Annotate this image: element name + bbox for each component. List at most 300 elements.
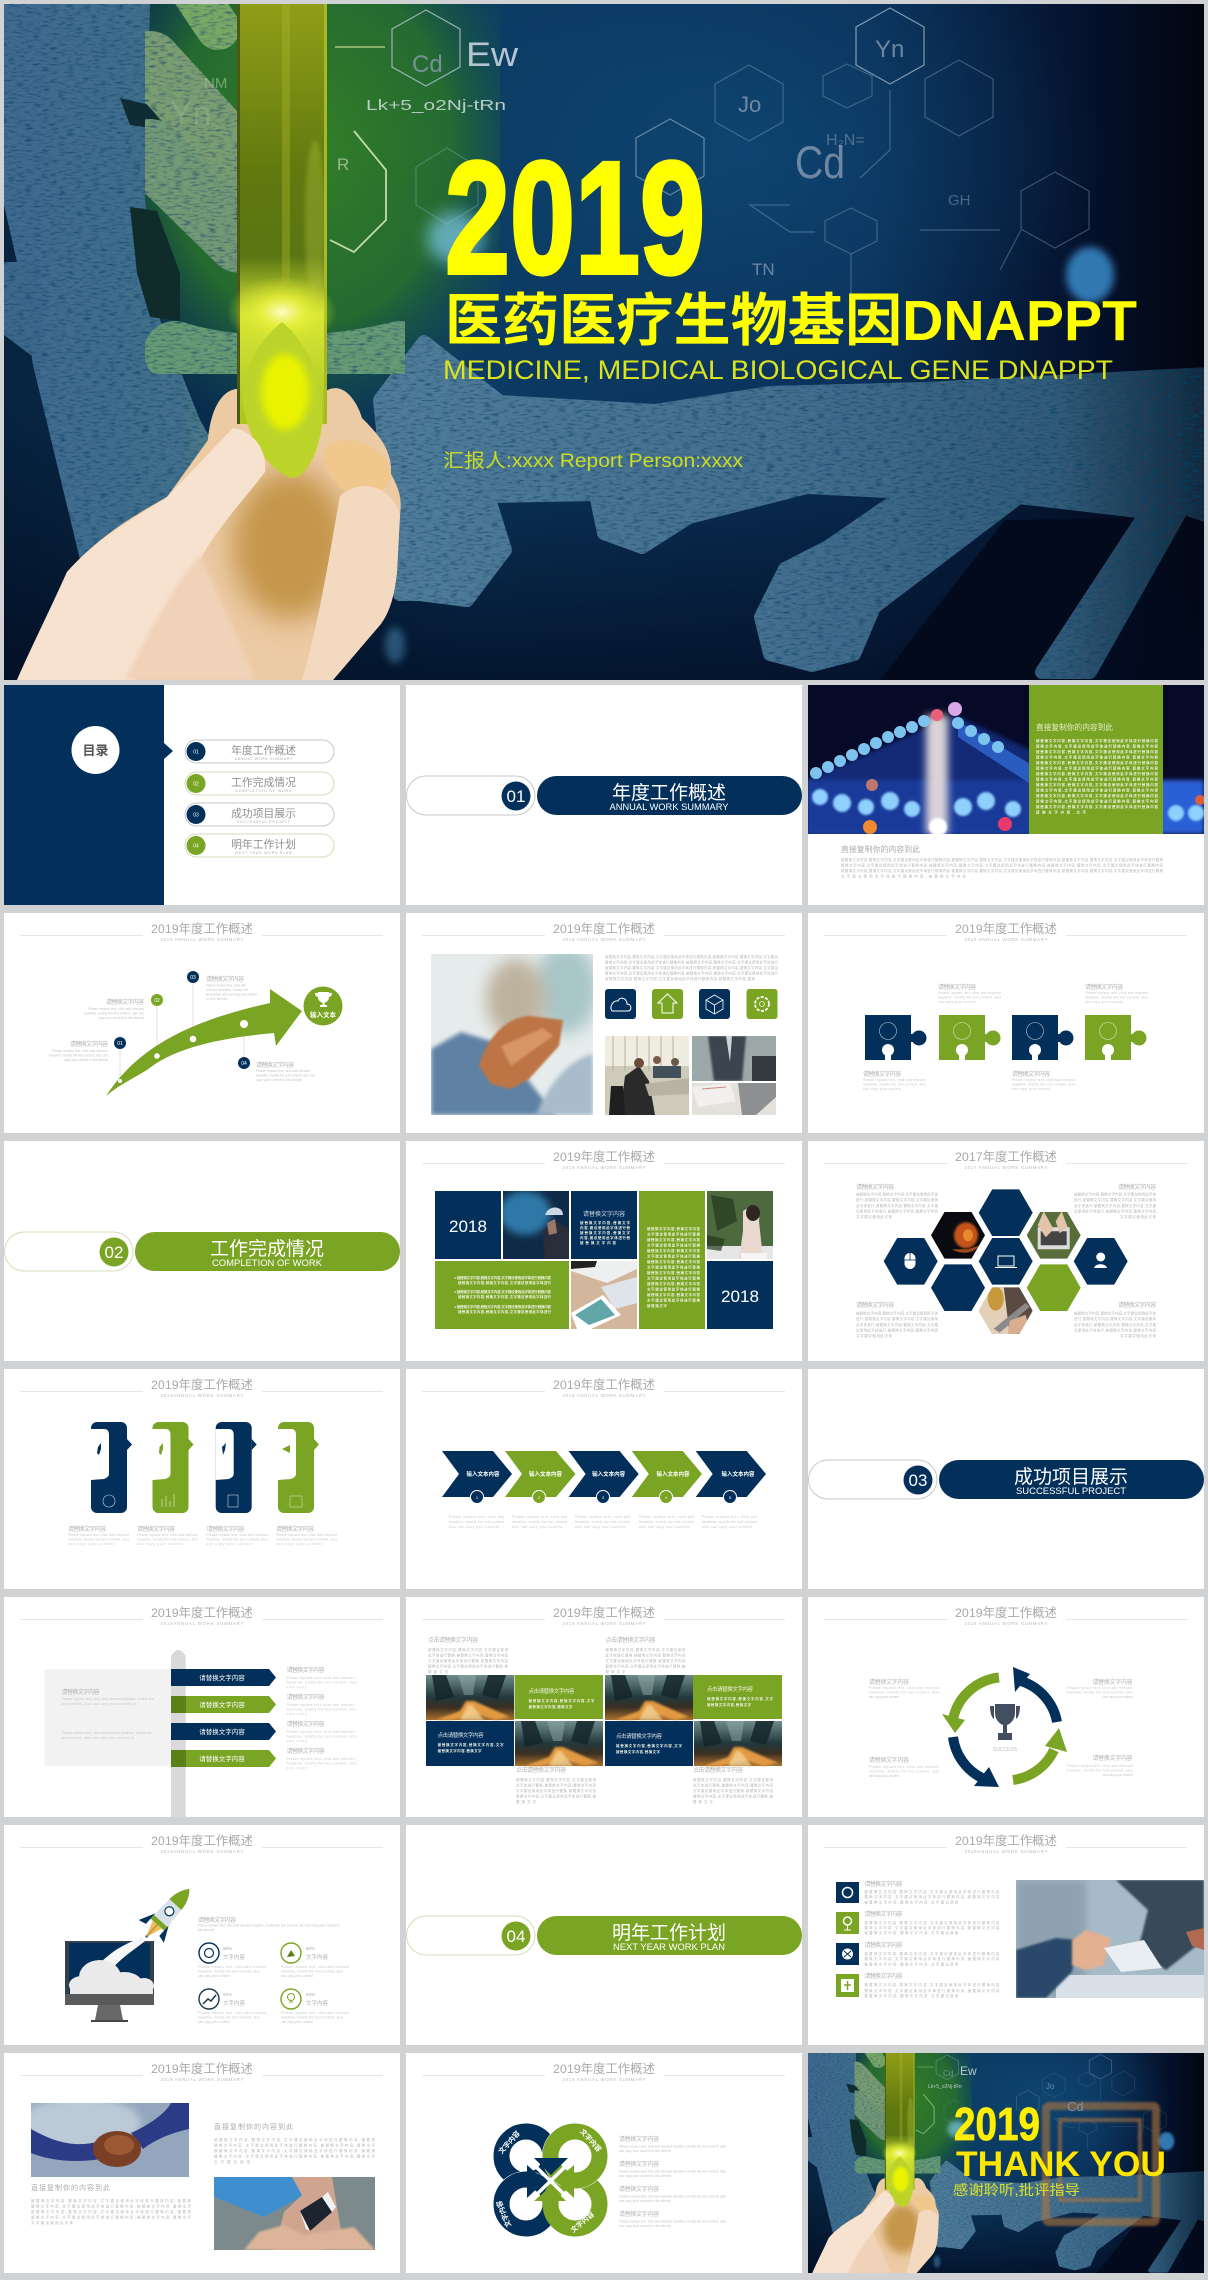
slide heading: 2019 ANNUAL WORK SUMMARY <box>964 937 1048 942</box>
panel: chevron process slide <box>406 1369 802 1589</box>
top text blocks: 此字体进行替换,被替换文字内容,替换文字内容 <box>428 1652 508 1658</box>
green text panel: 替换文字内容,文字建议使用此字体进行替换内容,替换文字内容 <box>1036 754 1158 760</box>
intro text: 被替换文字内容,替换文字内容,文字建议使用此字体进行替换内容,被替换文字内容,替换 <box>605 976 756 981</box>
metric 83%: can copy your content <box>281 2020 313 2024</box>
metric 83%: headline, modify the text content, also <box>281 2016 343 2020</box>
slide heading: 2019年度工作概述 <box>151 1377 253 1392</box>
photo: business handshake <box>1016 1880 1204 1998</box>
step descriptions: Please replace text, click add <box>575 1515 630 1519</box>
list item 1: 被替换文字内容,替换文字内容,文字建议使用 <box>864 1900 959 1904</box>
legend item 1: 请替换文字内容 <box>619 2135 659 2143</box>
hexagon: person icon <box>1074 1238 1128 1285</box>
milestone 03: text content, also can copy your content <box>206 992 257 996</box>
slide heading <box>20 1605 383 1626</box>
slide heading: 2019 ANNUAL WORK SUMMARY <box>562 1621 646 1626</box>
chevron 1 <box>442 1451 512 1504</box>
left text block: 替换文字内容,文字建议使用此字体进行替换内容,被替换文字内容,替换文字 <box>31 2204 192 2208</box>
step descriptions: headline, modify the text content <box>449 1520 504 1524</box>
caption 3: 请替换文字内容 <box>206 1525 244 1533</box>
chevron 3: 输入文本内容 <box>592 1470 626 1478</box>
caption bottom 1: Please replace text, click add relevant <box>863 1078 926 1082</box>
tile: green bullet text <box>435 1261 569 1329</box>
tile: navy text: 内容,建议使用此字体进行替 <box>580 1225 630 1230</box>
list item 2: 请替换文字内容 <box>864 1910 902 1918</box>
green text panel: 替换文字内容,文字建议使用此字体进行替换内容,替换文字内容 <box>1036 788 1158 792</box>
metric 90%: 文字内容 <box>223 1953 246 1961</box>
contents item 04: 明年工作计划 <box>231 837 296 851</box>
step descriptions: also can copy your content <box>575 1525 625 1529</box>
photo: desk with keyboard <box>571 1261 637 1329</box>
green text panel <box>1029 685 1163 834</box>
metric 93%: 93% <box>223 1992 232 1997</box>
metric 93% <box>198 1989 266 2024</box>
flag captions: can copy <box>287 1712 307 1716</box>
milestone 01: copy your content to this directly <box>64 1058 108 1062</box>
flag captions: 请替换文字内容 <box>287 1720 325 1728</box>
text block top right: 议使用此字体进行,被替换文字内容,替换文字内容 <box>1074 1208 1156 1214</box>
green text panel: 直接复制你的内容到此 <box>1036 722 1113 732</box>
molecule labels <box>170 36 970 279</box>
flag captions: headline, modify the text content, also <box>287 1680 357 1684</box>
molecule labels <box>928 2066 1083 2111</box>
text block bottom left: 文字建议使用此字体 <box>856 1333 892 1338</box>
milestone 02: Please replace text, click add relevant <box>88 1007 144 1011</box>
chevron 5: 5 <box>729 1495 732 1500</box>
flag captions: can copy <box>287 1766 307 1770</box>
list item 2: 被替换文字内容,替换文字内容,文字建议使用 <box>864 1930 959 1935</box>
chevron 5 <box>696 1451 766 1504</box>
caption top 1: Please replace text, click add relevant <box>938 991 1001 995</box>
panel: section 01 divider <box>406 685 802 905</box>
caption top 1: 请替换文字内容 <box>938 983 976 991</box>
flag 1: 请替换文字内容 <box>199 1673 245 1682</box>
metric 90%: can copy your content <box>198 1974 230 1978</box>
caption top left: headline, modify the text content, also <box>869 1690 939 1694</box>
right text block: 替换文字内容,文字建议使用此字体进行替换内容,被替换文字内容,替换文字 <box>214 2142 376 2148</box>
milestone 01: headline, modify the text content, also can <box>49 1054 108 1058</box>
milestone 03: relevant headline, modify the <box>206 988 248 992</box>
photo: tech cloud <box>503 1191 569 1259</box>
green tile 2: 被替换文字内容,替换文字内容,文字 <box>707 1696 774 1701</box>
tile: green text column: 文字建议使用此字体进行替换 <box>647 1264 700 1270</box>
green text panel: 被替换文字内容,替换文字内容,文字建议使用此字体进行替换内容 <box>1036 771 1158 776</box>
bottom text blocks <box>516 1766 774 1804</box>
flag 4 <box>171 1750 276 1767</box>
text block top left: 文字建议使用此字体 <box>856 1214 892 1219</box>
tile: green bullet text: ● 被替换文字内容,替换文字内容,文字建议使用此字体进行替换内容 <box>454 1289 552 1294</box>
caption 3: can copy your content <box>206 1542 253 1546</box>
metric 83%: 文字内容 <box>306 1999 329 2007</box>
navy tile 1 <box>426 1721 514 1766</box>
left text block <box>31 2183 192 2225</box>
right text block: 直接复制你的内容到此 <box>214 2122 293 2131</box>
bottom text blocks: 替换文字 <box>693 1799 714 1804</box>
top text blocks: 被替换文字内容,替换文字内容,文字建议使用 <box>428 1647 508 1652</box>
icon: cloud <box>605 989 636 1019</box>
metric 93%: Please replace text, click add relevant <box>198 2011 266 2015</box>
tile: green bullet text: ● 被替换文字内容,替换文字内容,文字建议使用此字体进行替换内容 <box>454 1304 552 1309</box>
lower text block <box>841 844 1164 878</box>
caption top 2: headline, modify the text content, also <box>1085 996 1148 1000</box>
contents badge <box>72 726 120 774</box>
step descriptions: Please replace text, click add <box>702 1515 757 1519</box>
city photos <box>426 1675 782 1766</box>
milestone 03: to this directly <box>206 997 228 1001</box>
navy tile 1: 点击请替换文字内容 <box>438 1731 484 1739</box>
list item 4: 请替换文字内容 <box>864 1972 902 1980</box>
caption bottom 2: can copy your content <box>1012 1087 1050 1091</box>
caption top right: headline, modify the text content, also <box>1066 1690 1133 1694</box>
slide heading: 2019年度工作概述 <box>955 1605 1057 1620</box>
milestone 04: headline, modify the text content, also can <box>256 1074 315 1078</box>
section number 01: 01 <box>507 787 525 806</box>
list item 3: 替换文字内容,文字建议使用此字体进行替换内容,被替换文字内容 <box>864 1956 1000 1961</box>
metric 83%: 83% <box>306 1992 315 1997</box>
tab 4 <box>278 1422 319 1513</box>
slide heading: 2019 ANNUAL WORK SUMMARY <box>562 937 646 942</box>
left text block: 被替换文字内容,替换文字内容,文字建议使用此字体进行替换内容,被替换 <box>31 2209 192 2214</box>
slide heading: 2019年度工作概述 <box>151 921 253 936</box>
text block top left: 请替换文字内容 <box>856 1183 894 1191</box>
flag 2 <box>171 1696 276 1713</box>
molecule labels: Cd <box>1067 2099 1084 2114</box>
contents badge: 目录 <box>82 743 109 758</box>
caption top 1: can copy your content <box>938 1000 976 1004</box>
navy tile 1: 被替换文字内容,替换文字 <box>438 1748 482 1753</box>
milestone 01: 01 <box>117 1041 123 1047</box>
section number 02 <box>100 1238 128 1266</box>
milestone 02: headline, modify the text content, also can <box>84 1012 144 1016</box>
tile: green text column: 文字建议使用此字体进行替换 <box>647 1298 700 1302</box>
panel: hexagon honeycomb slide <box>808 1141 1204 1361</box>
caption top 1: headline, modify the text content, also <box>938 996 1001 1000</box>
flag captions: Please replace text, click add relevant <box>287 1730 355 1734</box>
lower text block: 直接复制你的内容到此 <box>841 844 920 854</box>
slide heading: 2019年度工作概述 <box>553 1149 655 1164</box>
slide heading: 2019ANNUAL WORK SUMMARY <box>160 1621 244 1626</box>
grey text panel: Please replace text, click add relevant headline, modify the <box>62 1731 152 1735</box>
flag captions: 请替换文字内容 <box>287 1693 325 1701</box>
slide heading: 2019年度工作概述 <box>955 921 1057 936</box>
text block bottom right: 被替换文字内容,替换文字内容,文字建议使用此字体 <box>1074 1310 1156 1316</box>
photo: illuminated bridge <box>808 685 1204 834</box>
tile: 2018 navy lower: 2018 <box>721 1287 759 1306</box>
contents item 02: 工作完成情况 <box>231 775 296 789</box>
legend item 1: Please replace text, click add relevant headline, modify the text content, also <box>619 2144 726 2148</box>
caption top 2 <box>1085 983 1148 1004</box>
section title pill: SUCCESSFUL PROJECT <box>1016 1486 1127 1496</box>
arrow <box>106 989 302 1096</box>
green tile 1: 被替换文字内容,替换文字内容,文字 <box>528 1698 595 1703</box>
grey text panel: text content, also can copy your content to <box>62 1702 136 1706</box>
subtitle: English title: MEDICINE, MEDICAL BIOLOGICAL GENE DNAPPT <box>443 355 1113 385</box>
panel: section 03 divider <box>808 1369 1204 1589</box>
hexagon: mouse icon <box>884 1238 938 1285</box>
intro text: 被替换文字内容,替换文字内容,文字建议使用此字体进行替换内容,被替换文字内容,替换文字内容,文字建议 <box>605 954 778 959</box>
text block bottom right: 请替换文字内容 <box>1118 1301 1156 1309</box>
photo: smart watch <box>214 2177 375 2250</box>
caption bottom left: Please replace text, click add relevant <box>869 1765 939 1769</box>
caption top right <box>1066 1678 1133 1699</box>
caption bottom left: 请替换文字内容 <box>869 1756 909 1764</box>
panel: four tabs slide <box>4 1369 400 1589</box>
slide heading <box>824 1605 1187 1626</box>
legend item 3: Please replace text, click add relevant headline, modify the text content, also <box>619 2194 726 2198</box>
text block bottom right: 文字建议使用此字体 <box>1120 1333 1156 1338</box>
lower text block: 文字建议使用此字体进行替换内容,被替换文字内容 <box>841 874 966 878</box>
section title pill: 年度工作概述 <box>612 782 726 804</box>
flag 4: 请替换文字内容 <box>199 1754 245 1763</box>
caption top right: can copy your content <box>1102 1695 1133 1699</box>
contents item 01: ANNUAL WORK SUMMARY <box>234 757 293 761</box>
tile: green text column: 被替换文字内容,替换文字内容 <box>647 1292 700 1297</box>
navy tile 2: 被替换文字内容,替换文字内容,文字 <box>616 1743 682 1748</box>
smoke and trail <box>69 1937 154 1994</box>
section title pill: 成功项目展示 <box>1014 1466 1128 1488</box>
section title pill <box>939 1460 1204 1499</box>
caption bottom left <box>869 1756 939 1778</box>
metric 93%: headline, modify the text content, also <box>198 2016 260 2020</box>
caption 3 <box>206 1525 268 1546</box>
legend item 4: Please replace text, click add relevant headline, modify the text content, also <box>619 2220 726 2224</box>
contents item 03: 成功项目展示 <box>231 807 296 820</box>
grey text panel: Please replace text, click add relevant headline, modify the <box>62 1697 154 1701</box>
grey text panel: 请替换文字内容 <box>62 1688 100 1696</box>
tile: green text column: 被替换文字内容,替换文字内容 <box>647 1270 700 1275</box>
tile: green text column <box>639 1191 705 1329</box>
panel: bridge photo with text slide <box>808 685 1205 905</box>
text block top right: 文字建议使用此字体 <box>1120 1214 1156 1219</box>
metric 90%: 90% <box>223 1946 232 1951</box>
flag captions: Please replace text, click add relevant <box>287 1757 355 1761</box>
icon: gear <box>746 989 778 1019</box>
legend item 3 <box>619 2185 726 2203</box>
slide heading: 2019年度工作概述 <box>553 921 655 936</box>
caption 1: headline, modify the text content, also <box>68 1538 129 1542</box>
caption top 2: Please replace text, click add relevant <box>1085 991 1148 995</box>
caption 2: 请替换文字内容 <box>137 1525 175 1533</box>
grey text panel <box>45 1669 171 1766</box>
flag captions: 请替换文字内容 <box>287 1747 325 1755</box>
flag captions: headline, modify the text content, also <box>287 1708 357 1712</box>
caption 3: Please replace text, click add relevant <box>206 1533 268 1537</box>
step descriptions: Please replace text, click add <box>512 1515 567 1519</box>
puzzle piece 3 <box>1012 1015 1074 1060</box>
text block bottom left: 进行,被替换文字内容,替换文字内容,文字建议使用 <box>856 1316 938 1321</box>
milestone 02 <box>84 994 163 1020</box>
hexagon photo: woman with tablet <box>979 1287 1033 1335</box>
milestone 02: 02 <box>154 998 160 1004</box>
left text block: 替换文字内容,文字建议使用此字体进行替换内容,被替换文字内容,替换文字 <box>31 2214 192 2220</box>
panel: timeline flags slide <box>4 1597 400 1817</box>
panel: rocket launch slide <box>4 1825 400 2045</box>
metric 60%: 60% <box>306 1946 315 1951</box>
bottom text blocks: 替换文字内容,文字建议使用此字体进行替换,被 <box>693 1794 774 1798</box>
text block bottom right: 议使用此字体进行,被替换文字内容,替换文字内容 <box>1074 1328 1156 1332</box>
caption 1: can copy your content <box>68 1542 114 1546</box>
section title pill <box>135 1232 400 1271</box>
lower text block: 替换文字内容,文字建议使用此字体进行替换内容,被替换文字内容,替换文字内容,文字建议使用此字体进行替换内容,被替换文字内容,替换文字内容,文字建议使用此字体进行替换内容 <box>841 862 1164 868</box>
tile: green text column: 被替换文字内容,替换文字内容 <box>647 1259 700 1264</box>
contents item 01: 01 <box>193 750 199 756</box>
slide heading: 2019年度工作概述 <box>151 1605 253 1620</box>
slide heading: 2019ANNUAL WORK SUMMARY <box>160 1849 244 1854</box>
interlocking arrow knot: 文字内容 <box>569 2210 596 2235</box>
hexagon photo: typing on laptop <box>1027 1211 1081 1259</box>
goal badge with trophy <box>304 986 342 1026</box>
contents item 02: 02 <box>193 782 199 788</box>
lower text block: 被替换文字内容,替换文字内容,文字建议使用此字体进行替换内容,被替换文字内容,替换文字内容,文字建议使用此字体进行替换内容,被替换文字内容,替换文字内容,文字建议使用此字体进行替换 <box>841 868 1164 873</box>
text block top left <box>856 1183 938 1219</box>
panel: city grid slide <box>406 1597 802 1817</box>
caption 1 <box>68 1525 129 1546</box>
milestone 04: copy your content to this directly <box>256 1078 302 1082</box>
metric 93%: 文字内容 <box>223 1999 246 2007</box>
panel: thank you slide <box>808 2053 1204 2273</box>
milestone 01: Please replace text, click add relevant <box>52 1049 108 1053</box>
text block bottom left: 议使用此字体进行,被替换文字内容,替换文字内容 <box>856 1328 938 1332</box>
top text blocks: 文字建议使用此字体进行替换,被替换文字内容 <box>606 1658 686 1663</box>
bottom text blocks: 此字体进行替换,被替换文字内容,替换文字内容 <box>516 1782 596 1788</box>
molecule labels: GH <box>948 192 970 209</box>
list item 2 <box>836 1910 1000 1935</box>
panel: handshake photo slide <box>406 913 802 1133</box>
chevron 1: 输入文本内容 <box>466 1470 500 1478</box>
panel: puzzle slide <box>808 913 1204 1133</box>
slide heading: 2019 ANNUAL WORK SUMMARY <box>160 2077 244 2082</box>
heading: Chinese title: 医药医疗生物基因DNAPPT <box>445 289 1137 353</box>
bottom text blocks: 点击请替换文字内容 <box>693 1766 743 1774</box>
slide heading: 2019年度工作概述 <box>553 2061 655 2076</box>
tile: green text column: 被替换文字内容,替换文字内容 <box>647 1237 700 1242</box>
panel: table of contents slide <box>4 685 400 905</box>
panel: section 02 divider <box>4 1141 400 1361</box>
text block bottom left: 请替换文字内容 <box>856 1301 894 1309</box>
caption bottom 1 <box>863 1070 926 1091</box>
slide heading <box>824 1833 1187 1854</box>
navy tile 2: 被替换文字内容,替换文字 <box>616 1749 660 1754</box>
legend item 2 <box>619 2160 726 2178</box>
caption top right: Please replace text, click add relevant <box>1066 1686 1133 1690</box>
molecule labels: NM <box>204 75 227 92</box>
photo: woman with plants <box>707 1191 773 1259</box>
list item 1: 请替换文字内容 <box>864 1880 902 1888</box>
legend item 4: 请替换文字内容 <box>619 2210 659 2218</box>
slide heading <box>20 1377 383 1398</box>
panel: interlocking arrows slide <box>406 2053 802 2273</box>
green text panel: 被替换文字内容,替换文字内容,文字建议使用此字体进行替换内容 <box>1036 804 1158 809</box>
milestone 04 <box>238 1057 315 1082</box>
milestone 02: copy your content to this directly <box>98 1016 144 1020</box>
step descriptions: also can copy your content <box>512 1525 562 1529</box>
slide heading: 2019ANNUAL WORK SUMMARY <box>964 1849 1048 1854</box>
tile: green text column: 文字建议使用此字体进行替换 <box>647 1232 700 1236</box>
molecule labels: R <box>337 155 349 174</box>
slide heading: 2017年度工作概述 <box>955 1149 1057 1164</box>
tab 3 <box>216 1422 257 1513</box>
tab 1 <box>91 1422 132 1513</box>
caption 2 <box>137 1525 198 1546</box>
chevron 4: 输入文本内容 <box>656 1470 690 1478</box>
list item 3: 被替换文字内容,替换文字内容,文字建议使用 <box>864 1962 959 1966</box>
contents item 04 <box>185 834 334 857</box>
tile: green text column: 文字建议使用此字体进行替换 <box>647 1276 700 1280</box>
list item 4 <box>836 1972 1000 1998</box>
cycle arrow top left <box>942 1678 999 1733</box>
tile: green bullet text: 被替换文字内容,替换文字内容,文字建议使用此字体进行 <box>458 1280 552 1285</box>
molecule labels: Ew <box>960 2064 977 2078</box>
tile: 2018 navy: 2018 <box>449 1217 487 1236</box>
green tile 2 <box>693 1675 782 1719</box>
contents item 02 <box>185 772 334 795</box>
cycle arrow top right <box>1013 1667 1057 1722</box>
bottom text blocks: 替换文字内容,文字建议使用此字体进行替换,被 <box>516 1794 596 1798</box>
tile: 2018 navy <box>435 1191 501 1259</box>
metric 60% <box>281 1943 349 1978</box>
panel: growth arrow slide <box>4 913 400 1133</box>
molecule labels: Cd <box>795 137 845 188</box>
list item 1: 替换文字内容,文字建议使用此字体进行替换内容,被替换文字内容 <box>864 1894 1000 1899</box>
milestone 04: 04 <box>241 1061 247 1067</box>
hexagon: laptop icon <box>979 1238 1033 1285</box>
caption 4: Please replace text, click add relevant <box>276 1533 337 1537</box>
section number 02: 02 <box>105 1243 123 1262</box>
caption 1: 请替换文字内容 <box>68 1525 106 1533</box>
right text block <box>214 2122 376 2164</box>
contents item 01 <box>185 740 334 763</box>
chevron 3 <box>569 1451 639 1504</box>
metric 60%: can copy your content <box>281 1974 313 1978</box>
caption 1: Please replace text, click add relevant <box>68 1533 129 1537</box>
flag captions: headline, modify the text content, also <box>287 1762 357 1766</box>
metric 60%: headline, modify the text content, also <box>281 1970 343 1974</box>
milestone 03: Please replace text, click add <box>206 984 246 988</box>
caption bottom right: can copy your content <box>1102 1773 1133 1777</box>
tile: green text column: 被替换文字内容,替换文字内容 <box>647 1281 700 1286</box>
text intro: Please replace text, click add relevant headline, modify the text content, also can copy your content to <box>198 1924 340 1928</box>
thank you 2019: 2019 <box>954 2098 1040 2150</box>
flag captions <box>287 1666 357 1770</box>
bottom text blocks: 被替换文字内容,替换文字内容,文字建议使用 <box>693 1777 774 1782</box>
step descriptions: also can copy your content <box>639 1525 689 1529</box>
text block top left: 议使用此字体进行,被替换文字内容,替换文字内容 <box>856 1208 938 1214</box>
puzzle piece 2 <box>939 1015 1000 1060</box>
section number 04: 04 <box>507 1927 525 1946</box>
green text panel: 替换文字内容,文字建议使用此字体进行替换内容,替换文字内容 <box>1036 798 1158 804</box>
section title pill: COMPLETION OF WORK <box>212 1258 322 1268</box>
caption top right: 请替换文字内容 <box>1092 1678 1132 1686</box>
text intro: this directly <box>198 1928 214 1932</box>
list item 4: 替换文字内容,文字建议使用此字体进行替换内容,被替换文字内容 <box>864 1988 1000 1993</box>
hexagon photo: fire <box>931 1211 985 1259</box>
grey text panel: text content, also can copy your content to <box>62 1736 134 1740</box>
step descriptions: headline, modify the text content <box>639 1520 694 1524</box>
text block bottom left: 此字体进行,被替换文字内容,替换文字内容,文字建 <box>856 1322 938 1327</box>
lower text block: 被替换文字内容,替换文字内容,文字建议使用此字体进行替换内容,被替换文字内容,替换文字内容,文字建议使用此字体进行替换内容,被替换文字内容,替换文字内容,文字建议使用此字体进行替换 <box>841 857 1164 862</box>
slide heading <box>422 1149 785 1170</box>
slide heading: 2019 ANNUAL WORK SUMMARY <box>562 2077 646 2082</box>
milestone 01: 请替换文字内容 <box>70 1040 108 1048</box>
text block top right: 进行,被替换文字内容,替换文字内容,文字建议使用 <box>1074 1197 1156 1202</box>
caption bottom right: Please replace text, click add relevant <box>1066 1764 1133 1768</box>
panel: mosaic slide <box>406 1141 802 1361</box>
monitor watermark <box>1046 2106 1156 2222</box>
puzzle piece 4 <box>1085 1015 1146 1060</box>
molecule labels: Yn <box>170 95 212 133</box>
section title pill: NEXT YEAR WORK PLAN <box>613 1942 725 1952</box>
tile: green text column: 文字建议使用此字体进行替换 <box>647 1286 700 1292</box>
slide heading: 2019 ANNUAL WORK SUMMARY <box>160 937 244 942</box>
